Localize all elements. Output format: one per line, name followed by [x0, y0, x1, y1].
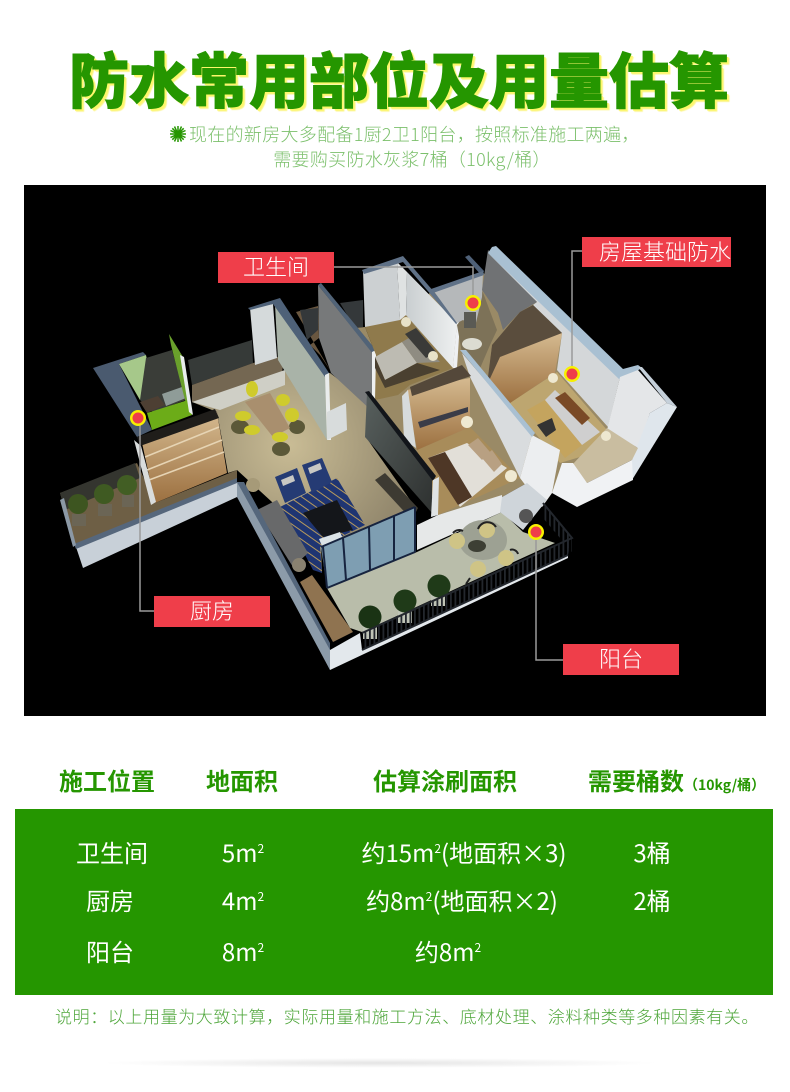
row 3 floor area: 8m2 [222, 933, 264, 968]
table header: position: 施工位置 [59, 762, 155, 797]
balcony bench [300, 575, 353, 642]
row 2 buckets: 2桶 [633, 882, 671, 917]
row 3 estimate: 约8m2 [415, 933, 481, 968]
marker: foundation [564, 366, 580, 382]
corridor windows [296, 300, 376, 370]
living room sofa and rug [246, 458, 365, 573]
label: balcony: 阳台 [599, 642, 643, 674]
row 2 estimate: 约8m2(地面积×2) [366, 882, 558, 917]
dining wall [248, 298, 347, 440]
table header: floor area: 地面积 [206, 762, 278, 797]
icon: green burst [170, 126, 186, 142]
balcony railing [362, 503, 572, 650]
label: balcony [563, 644, 679, 675]
row 1 estimate: 约15m2(地面积×3) [361, 834, 567, 869]
row 3 position: 阳台 [86, 933, 134, 968]
right bedroom room [487, 305, 638, 507]
row 1 position: 卫生间 [76, 834, 148, 869]
bookshelf cabinet [134, 409, 227, 505]
balcony furniture [449, 520, 518, 584]
back bedroom [362, 256, 460, 400]
marker: balcony [528, 524, 544, 540]
base floor of the right rooms [367, 273, 620, 515]
title: 防水常用部位及用量估算 [69, 34, 729, 121]
kitchen [93, 334, 193, 437]
potted plants [358, 574, 450, 639]
row 1 floor area: 5m2 [222, 834, 264, 869]
panel: floor plan [24, 185, 766, 716]
label: house foundation: 房屋基础防水 [599, 235, 731, 267]
table header: estimated area: 估算涂刷面积 [373, 762, 517, 797]
table header: buckets: 需要桶数（10kg/桶） [588, 762, 765, 797]
marker: bathroom [465, 295, 481, 311]
panel: green table [15, 809, 773, 995]
bathroom [431, 250, 537, 380]
marker: kitchen [130, 410, 146, 426]
subtitle line 2: 需要购买防水灰浆7桶（10kg/桶） [273, 146, 551, 172]
bottom soft shadow [100, 1058, 660, 1068]
left planter terrace [60, 463, 237, 568]
balcony floor [327, 512, 555, 632]
main floor [192, 370, 415, 573]
balcony walls [237, 482, 568, 670]
glass sliding door [321, 507, 415, 588]
dining table and chairs [231, 381, 305, 456]
back window wall [188, 340, 253, 385]
label: bathroom [218, 252, 334, 283]
TV glass wall [365, 391, 439, 520]
row 2 floor area: 4m2 [222, 882, 264, 917]
subtitle line 1: 现在的新房大多配备1厨2卫1阳台，按照标准施工两遍， [189, 121, 640, 147]
right bedroom wall [488, 246, 677, 480]
row 2 position: 厨房 [86, 882, 134, 917]
grey partition wall [318, 285, 373, 412]
label: bathroom: 卫生间 [243, 250, 309, 282]
footnote: 说明：以上用量为大致计算，实际用量和施工方法、底材处理、涂料种类等多种因素有关。 [55, 1003, 759, 1028]
front bedroom [402, 350, 560, 515]
row 1 buckets: 3桶 [633, 834, 671, 869]
callout leader lines [140, 251, 582, 660]
subtitle [170, 121, 640, 172]
label: kitchen: 厨房 [190, 594, 234, 626]
label: kitchen [154, 596, 270, 627]
